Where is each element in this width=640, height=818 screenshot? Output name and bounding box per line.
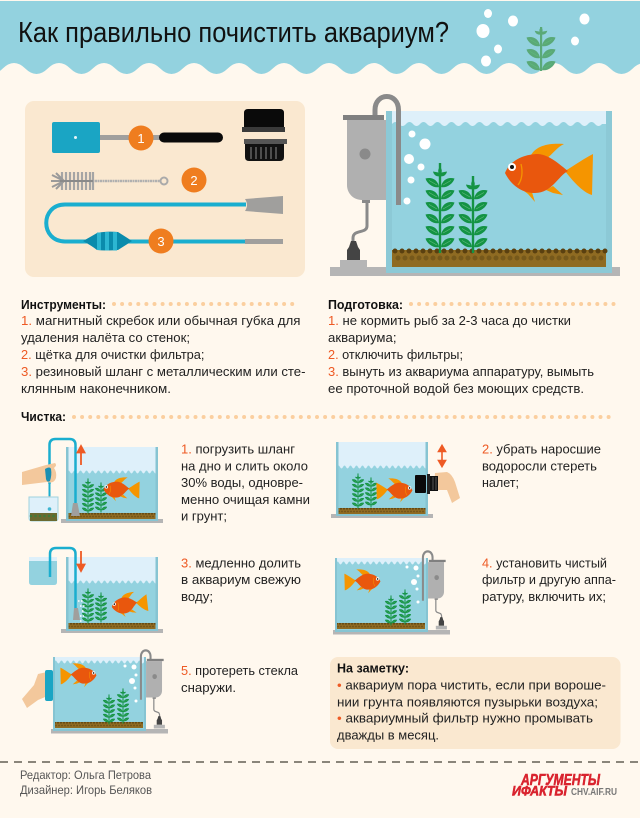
icon: filter brush <box>51 172 168 190</box>
step 2 illustration <box>331 442 460 518</box>
callout: note: дважды в месяц. <box>337 728 439 742</box>
icon: magnetic scraper <box>242 109 287 161</box>
step 5 text <box>181 663 299 695</box>
gravel <box>392 250 606 267</box>
step 1 text: 30% воды, одновре- <box>181 475 303 490</box>
hand <box>434 472 460 503</box>
icon: water plant <box>526 27 556 71</box>
number 2: 2 <box>190 173 198 188</box>
step 4 text <box>482 556 616 604</box>
logo: ИФАКТЫ <box>512 782 568 798</box>
text block: preparation: 1. не кормить рыб за 2-3 часа до чистки <box>328 313 571 328</box>
panel: tools illustration <box>25 101 305 277</box>
heading: preparation: Подготовка: <box>328 297 403 312</box>
step 3 text: в аквариум свежую <box>181 572 301 587</box>
step 1 illustration <box>22 439 163 523</box>
number 3 <box>148 228 174 254</box>
text block: tools: 1. магнитный скребок или обычная губка для <box>21 313 300 328</box>
step 1 text: и грунт; <box>181 508 227 524</box>
number 1: 1 <box>137 131 145 146</box>
goldfish <box>505 144 593 202</box>
heading: tools: Инструменты: <box>21 297 106 312</box>
icon: sponge scraper <box>52 122 218 153</box>
step 4 text: 4. установить чистый <box>482 556 607 570</box>
bubbles <box>404 130 430 204</box>
step 3 text <box>181 556 301 604</box>
step 4 illustration <box>333 551 450 634</box>
callout: note: • аквариум пора чистить, если при вороше- <box>337 678 606 692</box>
step 5 text: снаружи. <box>181 680 236 695</box>
plants <box>426 163 488 253</box>
text block: tools: 3. резиновый шланг с металлическим или сте- <box>21 364 306 379</box>
step 3 illustration <box>29 548 163 633</box>
arrow up <box>78 446 84 465</box>
number 3: 3 <box>157 234 165 249</box>
hose <box>50 548 76 612</box>
footer credits <box>0 762 640 797</box>
hand <box>22 463 56 485</box>
bubbles <box>78 601 86 621</box>
footer credits: Редактор: Ольга Петрова <box>20 768 151 782</box>
arrow down <box>78 551 84 571</box>
sponge <box>45 670 53 701</box>
title: Как правильно почистить аквариум? <box>18 17 449 49</box>
magnet <box>415 474 438 494</box>
step 1 text: менно очищая камни <box>181 492 310 507</box>
step 1 text: на дно и слить около <box>181 458 308 474</box>
step 3 text: 3. медленно долить <box>181 556 301 570</box>
step 5 illustration <box>22 650 168 734</box>
heading: cleaning: Чистка: <box>21 409 66 424</box>
step 2 text: водоросли стереть <box>482 458 597 474</box>
step 4 text: фильтр и другую аппа- <box>482 572 616 587</box>
logo: CHV.AIF.RU <box>571 787 617 798</box>
step 5 text: 5. протереть стекла <box>181 663 299 678</box>
bucket <box>29 497 58 521</box>
step 4 text: ратуру, включить их; <box>482 589 606 604</box>
step 2 text: 2. убрать наросшие <box>482 442 601 456</box>
bucket <box>29 557 57 585</box>
callout: note: нии грунта появляются пузырьки воздуха; <box>337 694 598 710</box>
filter <box>340 96 398 268</box>
step 1 text <box>181 442 310 524</box>
footer credits: Дизайнер: Игорь Беляков <box>20 783 152 797</box>
number 1 <box>128 126 154 150</box>
text block: preparation: ее проточной водой без моющих средств. <box>328 381 584 396</box>
step 3 text: воду; <box>181 589 213 604</box>
text block: preparation: 2. отключить фильтры; <box>328 347 463 362</box>
callout: note: • аквариумный фильтр нужно промывать <box>337 710 593 726</box>
callout: note <box>330 657 620 749</box>
text block: preparation <box>328 297 616 396</box>
text block: tools: клянным наконечником. <box>21 381 171 396</box>
text block: preparation: аквариума; <box>328 330 396 345</box>
logo <box>512 772 617 798</box>
text block: tools: удаления налёта со стенок; <box>21 330 190 345</box>
text block: tools: 2. щётка для очистки фильтра; <box>21 347 204 362</box>
text block: preparation: 3. вынуть из аквариума аппаратуру, вымыть <box>328 364 594 379</box>
main aquarium illustration <box>330 96 620 276</box>
header banner <box>0 1 640 74</box>
step 1 text: 1. погрузить шланг <box>181 442 295 456</box>
logo: АРГУМЕНТЫ <box>520 772 601 789</box>
double arrow <box>438 446 446 466</box>
text block: tools <box>21 297 306 396</box>
callout: note: На заметку: <box>337 660 409 676</box>
step 2 text: налет; <box>482 475 519 490</box>
icon: siphon hose <box>46 196 283 250</box>
hose <box>50 439 76 508</box>
hand <box>22 672 50 708</box>
number 2 <box>182 168 206 192</box>
step 2 text <box>482 442 601 490</box>
icon: bubbles <box>476 9 590 66</box>
